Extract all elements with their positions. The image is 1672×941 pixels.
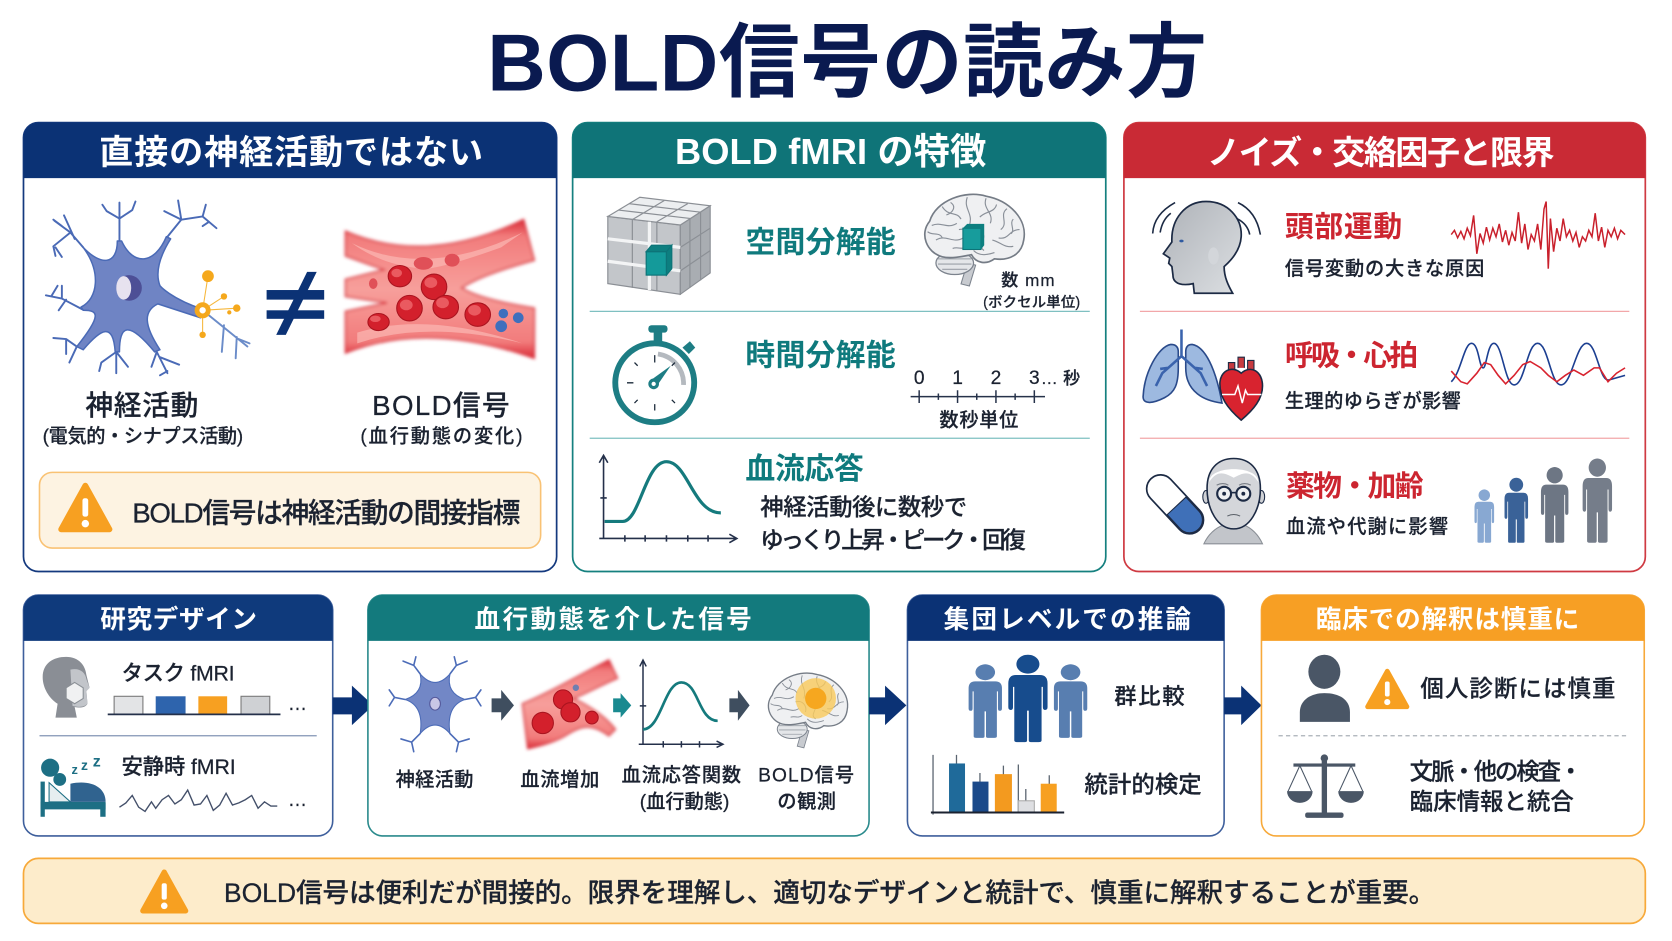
- panel heading: BOLD fMRI の特徴: [675, 131, 986, 172]
- icon: blood vessel: [346, 220, 534, 358]
- icon: scales: [1287, 754, 1364, 818]
- icon: voxel cube: [608, 197, 710, 294]
- panel heading: [907, 595, 1224, 641]
- text: 個人診断: 個人診断には慎重: [1420, 675, 1615, 701]
- text: 薬物・加齢: 血流や代謝に影響: [1286, 516, 1448, 538]
- step labels: 血流増加: [520, 769, 599, 791]
- chart: physiological waves: [1451, 343, 1625, 385]
- arrow: [492, 690, 514, 721]
- heading: 時間分解能: 時間分解能: [745, 340, 896, 373]
- icon: resting person: z: [81, 757, 88, 773]
- icon: head with voxel: [43, 657, 90, 718]
- panel: 直接の神経活動ではない: [23, 123, 557, 572]
- text: 文脈・他の検査: [1410, 758, 1582, 814]
- panel: 研究デザイン: [23, 595, 333, 836]
- step labels: BOLD信号: [758, 765, 854, 787]
- panel heading: 直接の神経活動ではない: [99, 134, 483, 172]
- text: 頭部運動: 頭部運動: [1285, 212, 1402, 244]
- arrow: [1224, 686, 1261, 725]
- icon: resting person: z: [71, 762, 78, 777]
- panel heading: 集団レベルでの推論: [944, 605, 1191, 634]
- time axis: …秒: [1041, 369, 1080, 388]
- icon: resting person: [41, 754, 106, 817]
- footer text: BOLD信号は便利だが間接的。限界を理解し、適切なデザインと統計で、慎重に解釈することが重要。: [224, 878, 1435, 908]
- label: BOLD信号: (血行動態の変化): [360, 426, 523, 448]
- block design: [108, 694, 307, 715]
- text: 数 mm: 数 mm: [1001, 271, 1055, 290]
- chart: small HRF: [639, 660, 723, 747]
- icon: age silhouettes: [1474, 459, 1612, 543]
- icon: neuron: [46, 200, 250, 375]
- panel: 臨床での解釈は慎重に: [1261, 595, 1644, 836]
- icon: small vessel: [523, 660, 617, 749]
- panel: 集団レベルでの推論: [907, 595, 1224, 836]
- time axis: 3: [1029, 368, 1040, 389]
- icon: brain with voxel: [925, 194, 1024, 286]
- text: 薬物・加齢: 薬物・加齢: [1286, 471, 1424, 503]
- not-equal sign: [267, 272, 324, 335]
- panel heading: [1124, 123, 1645, 178]
- chart: resting wave: …: [288, 790, 307, 811]
- label: 神経活動: [43, 390, 243, 448]
- panel heading: [23, 595, 333, 641]
- text: 群比較: 群比較: [1114, 684, 1185, 709]
- step labels: 神経活動: [396, 769, 473, 791]
- callout: [39, 472, 541, 548]
- label: BOLD信号: [360, 390, 523, 448]
- icon: warning: [1368, 671, 1407, 707]
- panel heading: 臨床での解釈は慎重に: [1316, 605, 1579, 634]
- icon: small neuron: [389, 657, 481, 752]
- step labels: の観測: [777, 791, 836, 813]
- icon: pill and elderly person: [1141, 459, 1265, 544]
- panel heading: [23, 123, 557, 178]
- text: 頭部運動: [1285, 212, 1484, 280]
- step labels: (血行動態): [640, 791, 729, 813]
- text: タスク fMRI: タスク fMRI: [122, 661, 235, 685]
- label: BOLD信号: BOLD信号: [372, 390, 510, 421]
- panel heading: 研究デザイン: [100, 604, 257, 634]
- panel: BOLD fMRI の特徴: [573, 123, 1106, 572]
- arrow: [333, 686, 373, 725]
- panel heading: 血行動態を介した信号: [475, 605, 752, 634]
- text: 文脈・他の検査: 臨床情報と統合: [1410, 788, 1574, 814]
- panel: 血行動態を介した信号: [368, 595, 869, 836]
- panel heading: [1261, 595, 1644, 641]
- text: 血流応答 description: [760, 494, 1026, 553]
- text: 呼吸・心拍: 呼吸・心拍: [1285, 341, 1418, 373]
- panel: ノイズ・交絡因子と限界: [1124, 123, 1645, 572]
- text: 呼吸・心拍: 生理的ゆらぎが影響: [1285, 390, 1461, 412]
- chart: resting wave: [119, 790, 307, 811]
- panel heading: [573, 123, 1106, 178]
- time axis: 数秒単位: [939, 410, 1018, 432]
- step labels: [396, 764, 854, 813]
- time axis: 0: [914, 368, 925, 389]
- arrow: [729, 690, 750, 721]
- arrow: [869, 686, 906, 725]
- text: 血流応答 description: ゆっくり上昇・ピーク・回復: [760, 527, 1026, 553]
- icon: resting person: z: [93, 754, 101, 771]
- chart: hemodynamic response: [599, 455, 737, 543]
- icon: lungs and heart: [1143, 329, 1263, 420]
- label: 神経活動: 神経活動: [85, 390, 198, 421]
- step labels: 血流応答関数: [622, 764, 741, 787]
- text: 呼吸・心拍: [1285, 341, 1461, 412]
- title: BOLD信号の読み方: [487, 19, 1207, 109]
- block design: …: [288, 694, 307, 715]
- text: 統計的検定: 統計的検定: [1084, 771, 1202, 797]
- time axis: 2: [991, 368, 1001, 389]
- text: 数 mm: (ボクセル単位): [983, 294, 1080, 311]
- panel heading: [368, 595, 869, 641]
- arrow: [613, 693, 631, 718]
- icon: stopwatch: [615, 325, 695, 422]
- callout: BOLD信号は神経活動の間接指標: [132, 497, 520, 528]
- text: 文脈・他の検査: 文脈・他の検査・: [1410, 758, 1582, 784]
- text: 数 mm: [983, 271, 1080, 311]
- text: 薬物・加齢: [1286, 471, 1448, 538]
- icon: group: [969, 655, 1087, 742]
- heading: 空間分解能: 空間分解能: [745, 227, 896, 260]
- text: 血流応答 description: 神経活動後に数秒で: [760, 494, 967, 520]
- icon: warning: [143, 872, 186, 911]
- heading: 血流応答: 血流応答: [745, 453, 864, 486]
- label: 神経活動: (電気的・シナプス活動): [43, 426, 243, 448]
- icon: activated brain: [768, 673, 848, 748]
- chart: bars: [931, 755, 1064, 815]
- panel heading: ノイズ・交絡因子と限界: [1207, 134, 1555, 172]
- time axis: [911, 368, 1080, 432]
- icon: person: [1300, 655, 1350, 722]
- text: 安静時 fMRI: 安静時 fMRI: [122, 755, 236, 779]
- text: 頭部運動: 信号変動の大きな原因: [1285, 258, 1484, 280]
- icon: head motion: [1153, 202, 1260, 293]
- time axis: 1: [952, 368, 963, 389]
- footer callout: [23, 858, 1645, 923]
- chart: motion noise signal: [1451, 202, 1625, 269]
